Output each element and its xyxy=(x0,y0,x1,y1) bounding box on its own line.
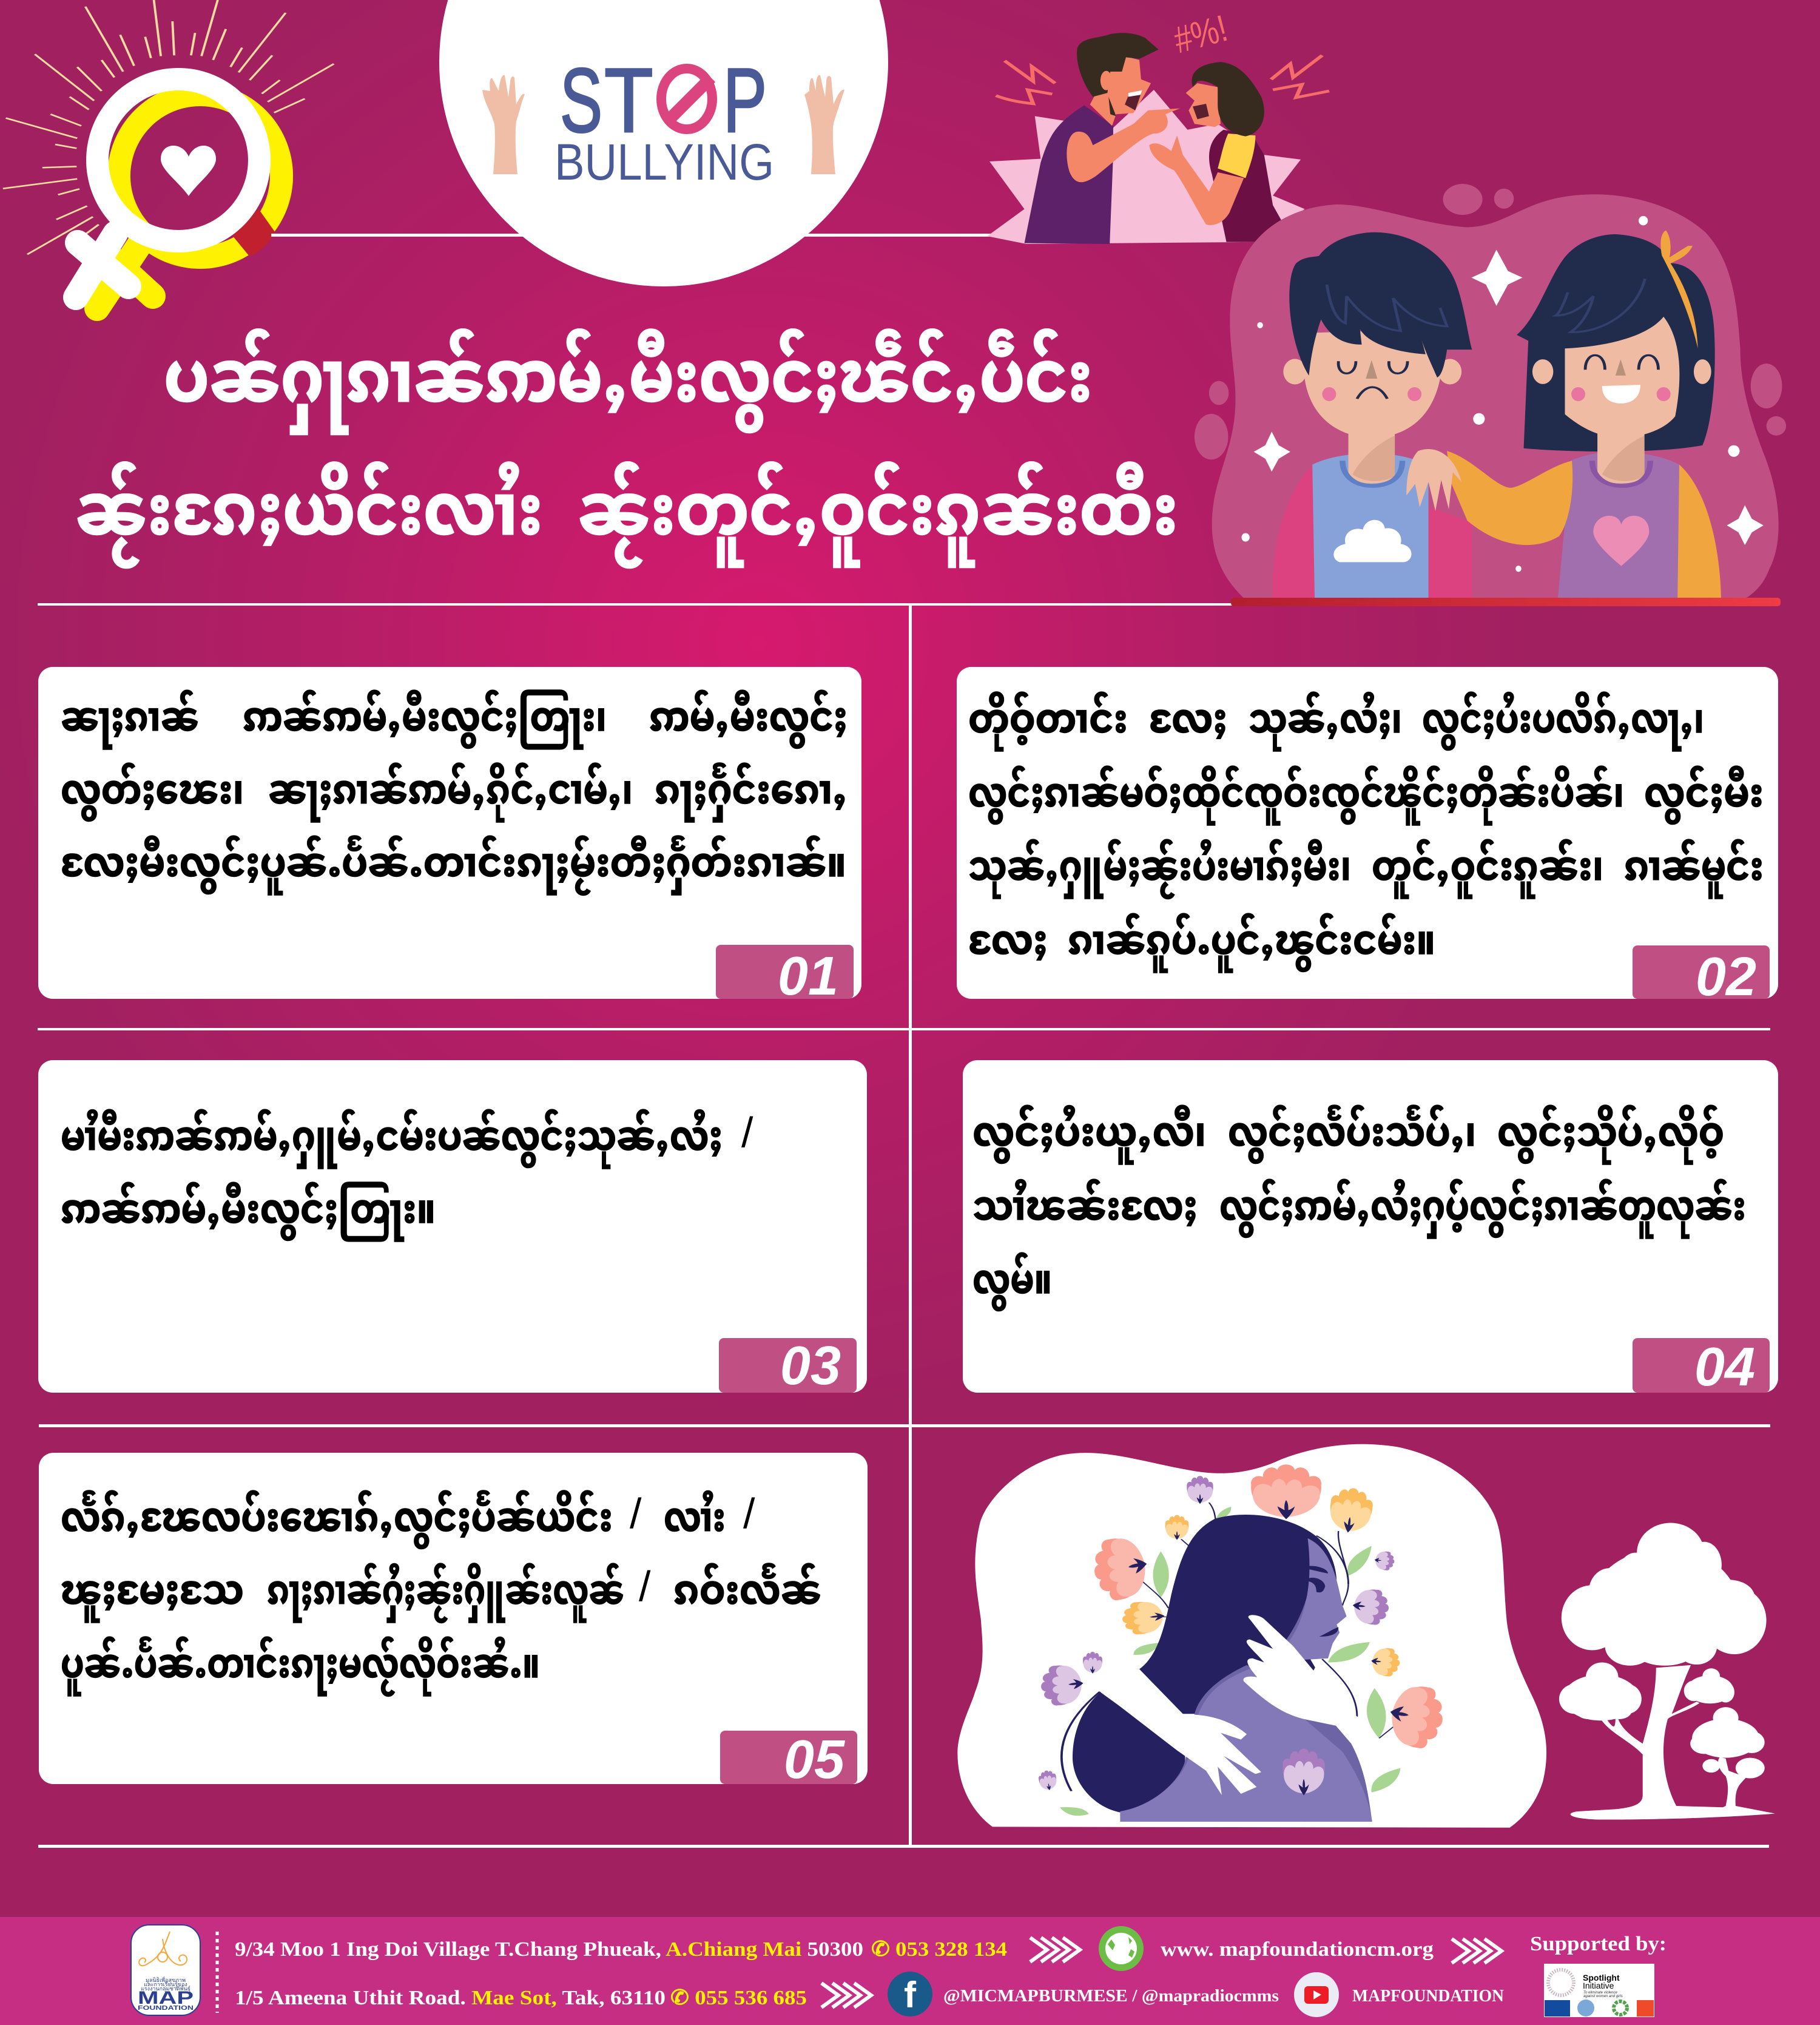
card 01 text xyxy=(61,689,848,896)
grid rules xyxy=(38,603,1770,1848)
map foundation logo: MAP xyxy=(138,1988,194,2008)
card 04 text: လွင်ႈသိုပ်ႇလိုဝ့် xyxy=(1497,1104,1724,1165)
flowers xyxy=(1090,1464,1448,1751)
title line 1: ပၼ်ႁႃၵၢၼ်ၵာမ်ႇမီးလွင်ႈၽဵင်ႇပဵင်း xyxy=(164,328,1093,434)
white ring xyxy=(86,68,271,252)
girl ears xyxy=(1532,359,1553,384)
dashed divider xyxy=(216,1932,218,2013)
card 05 text: / xyxy=(743,1490,755,1537)
badge 01 xyxy=(716,945,854,1007)
illustration: woman and flowers xyxy=(957,1444,1546,1828)
spotlight initiative logo: To eliminate violence xyxy=(1583,1991,1617,1995)
icon: facebook xyxy=(888,1972,932,2017)
phone 2: ✆ 055 536 685 xyxy=(670,1987,807,2009)
panel: card 02 xyxy=(957,667,1778,1007)
spotlight initiative logo: Spotlight xyxy=(1583,1973,1620,1983)
supported by: Supported by: xyxy=(1530,1933,1667,1955)
boy hair xyxy=(1289,232,1472,377)
card 05 text: ၽူႈမႄႈသႄ xyxy=(61,1567,244,1623)
card 02 text: လႄႈ xyxy=(968,918,1048,962)
STOP text: S xyxy=(560,50,602,151)
girl xyxy=(1406,231,1721,598)
panel: card 05 xyxy=(39,1453,868,1790)
female symbol icon with rays xyxy=(3,0,334,308)
white circle xyxy=(439,0,888,286)
burst xyxy=(987,90,1305,244)
boy face details xyxy=(1338,361,1407,399)
girl face xyxy=(1565,317,1679,438)
leaves xyxy=(1060,1507,1401,1816)
map foundation logo: มูลนิธิเพื่อสุขภาพ xyxy=(146,1976,186,1984)
card 02 text: လွင်ႈၵၢၼ်မဝ်ႈထိုင်ၸူဝ်းၸွင်ၽိူင်ႈတိုၼ်းပိၼ်၊ xyxy=(968,765,1624,825)
girl hair back xyxy=(1517,234,1715,451)
red bar xyxy=(1231,598,1781,606)
boy ears xyxy=(1283,359,1307,385)
girl neck xyxy=(1597,434,1645,484)
white cross xyxy=(76,234,129,297)
card 04 text: သၢႆၽၼ်းလႄႈ xyxy=(972,1178,1198,1228)
badge 05: 05 xyxy=(784,1729,846,1790)
icon: youtube xyxy=(1294,1972,1339,2017)
stop bullying badge xyxy=(439,0,888,286)
card 02 text: တိုဝ့်တၢင်း xyxy=(968,691,1128,751)
card 04 text: လွမ်။ xyxy=(972,1252,1052,1311)
title line 2: ၼႂ်းတူင်ႇဝူင်းၵူၼ်းထီး xyxy=(578,461,1178,568)
panel: card 01 xyxy=(38,667,861,1007)
card 02 text xyxy=(968,691,1764,973)
woman xyxy=(1149,62,1281,242)
icon: facebook: f xyxy=(904,1975,917,2015)
card 02 text: သုၼ်ႇႁူမ်ႈၼႂ်းပႆးမၢၵ်ႈမီး၊ xyxy=(968,839,1351,899)
girl face details xyxy=(1585,355,1659,370)
bubbles xyxy=(1195,184,1786,459)
card 05 text: လၢႆး xyxy=(664,1490,726,1540)
card 01 text: ၼႃႈၵၢၼ်ၵာမ်ႇၵိုင်ႇငၢမ်ႇ၊ xyxy=(268,762,633,822)
boy neck xyxy=(1349,434,1395,484)
badge 05 xyxy=(720,1729,857,1790)
badge 02 xyxy=(1633,945,1770,1007)
chevrons 1 xyxy=(1030,1938,1080,1962)
card 05 text: / xyxy=(639,1563,651,1610)
card 05 text: ပူၼ်ႉပႅၼ်ႉတၢင်းၵႃႈမလႂ်လိုဝ်းၼႆႉ။ xyxy=(61,1636,540,1697)
heart xyxy=(161,146,216,196)
hand on shoulder xyxy=(1406,449,1461,511)
STOP text: P xyxy=(723,50,767,151)
website: www. mapfoundationcm.org xyxy=(1161,1938,1434,1961)
card 02 text: လွင်ႈမီး xyxy=(1644,765,1764,824)
rays xyxy=(3,0,334,254)
title xyxy=(75,328,1178,568)
card 02 text: လွင်ႈပႆးပလိၵ်ႇလႃႇ၊ xyxy=(1422,691,1704,751)
boy xyxy=(1273,232,1472,598)
card 02 text: သုၼ်ႇလႆႈ၊ xyxy=(1249,691,1402,751)
lower hair xyxy=(1073,1692,1185,1813)
arm and hand on shoulder xyxy=(1084,1669,1261,1795)
badge 04: 04 xyxy=(1694,1337,1755,1398)
footer xyxy=(0,1917,1820,2025)
card 01 text: လွတ်ႈၽေး၊ xyxy=(61,762,244,821)
boy shirt xyxy=(1273,465,1472,598)
chevrons 2 xyxy=(1452,1939,1502,1963)
title line 2 xyxy=(75,461,1178,568)
card 03 text xyxy=(61,1109,753,1242)
card 04 text: လွင်ႈပႆးယူႇလီ၊ xyxy=(972,1104,1206,1165)
card 04 text: လွင်ႈလႅပ်းသႅပ်ႇ၊ xyxy=(1228,1104,1476,1163)
girl headband xyxy=(1660,231,1698,348)
face xyxy=(1281,1538,1331,1660)
girl shirt xyxy=(1558,452,1679,598)
hand on neck xyxy=(1244,1615,1357,1730)
card 05 text: လႅၵ်ႇၽႄလပ်းၽေၢၵ်ႇလွင်ႈပႅၼ်ယိင်း xyxy=(61,1490,613,1549)
sparkles xyxy=(1241,216,1764,572)
address line 1: 9/34 Moo 1 Ing Doi Village T.Chang Phueak, A.Chiang Mai 50300 xyxy=(235,1938,863,1961)
card 01 text: ၵာၼ်ၵာမ်ႇမီးလွင်ႈတြႃး၊ xyxy=(243,689,607,749)
yellow shadow symbol xyxy=(97,83,293,308)
card 01 text: ၼႃႈၵၢၼ် xyxy=(61,689,199,749)
cloud xyxy=(1333,520,1412,562)
card 01 text: ၵာမ်ႇမီးလွင်ႈ xyxy=(649,689,848,748)
youtube name: MAPFOUNDATION xyxy=(1352,1987,1504,2006)
panel: card 04 xyxy=(963,1060,1778,1398)
card 03 text: / xyxy=(741,1109,753,1156)
girl heart xyxy=(1593,516,1649,566)
card 02 text: ၵၢၼ်မူင်း xyxy=(1624,839,1764,899)
card 02 text: ၵၢၼ်ၵူပ်ႉပူင်ႇၽွင်းငမ်း။ xyxy=(1068,913,1435,973)
address line 2: 1/5 Ameena Uthit Road. Mae Sot, Tak, 63110 xyxy=(235,1987,666,2009)
right hand xyxy=(804,75,844,174)
swear symbols: #%! xyxy=(1170,7,1232,62)
STOP text: T xyxy=(604,49,653,151)
card 05 text: ၵႃႈၵၢၼ်ႁႆႈၼႂ်းႁိူၼ်းလူၼ် xyxy=(267,1563,624,1623)
boy face xyxy=(1305,329,1441,438)
social handles: @MICMAPBURMESE / @mapradiocmms xyxy=(943,1987,1279,2006)
map foundation logo xyxy=(131,1925,200,2015)
card 04 text: လွင်ႈၵာမ်ႇလႆႈႁပ့်လွင်ႈၵၢၼ်တူလုၼ်း xyxy=(1219,1178,1746,1239)
white blob xyxy=(957,1444,1546,1828)
friends illustration xyxy=(1195,184,1786,598)
boy collar xyxy=(1343,461,1403,486)
chevrons 3 xyxy=(821,1983,871,2007)
card 03 text: ၵာၼ်ၵာမ်ႇမီးလွင်ႈတြႃး။ xyxy=(61,1182,436,1242)
map foundation logo: แรงงานกลุ่มชาติพันธุ์ xyxy=(141,1985,190,1992)
red segment xyxy=(232,209,275,255)
arguing couple illustration xyxy=(987,33,1329,244)
badge 02: 02 xyxy=(1696,947,1756,1007)
card 02 text: လႄႈ xyxy=(1149,696,1227,741)
girl collar xyxy=(1592,461,1650,486)
badge 01: 01 xyxy=(778,946,838,1007)
stems xyxy=(1141,1503,1398,1822)
map foundation logo: และการเรียนรู้ของ xyxy=(144,1981,187,1988)
card 05 text: ၵဝ်းလႅၼ် xyxy=(673,1563,821,1612)
panel: card 03 xyxy=(38,1060,867,1396)
card 05 text xyxy=(61,1490,821,1697)
footer band xyxy=(0,1917,1820,2025)
left hand xyxy=(482,75,525,174)
card 05 text: / xyxy=(630,1490,642,1537)
card 04 text xyxy=(972,1104,1746,1311)
spotlight initiative logo: Initiative xyxy=(1583,1981,1614,1990)
facial features xyxy=(1308,1566,1338,1637)
body xyxy=(1120,1665,1372,1822)
girl arm xyxy=(1447,451,1572,545)
icon: globe xyxy=(1099,1926,1144,1971)
card 01 text: ၵႃႈႁႅင်းၵေၢႇ xyxy=(655,762,848,822)
phone 1: ✆ 053 328 134 xyxy=(871,1938,1007,1961)
blob xyxy=(1212,194,1779,598)
spotlight initiative logo: against women and girls xyxy=(1583,1995,1623,1998)
BULLYING text: BULLYING xyxy=(554,134,774,191)
hair xyxy=(1139,1515,1354,1714)
horizontal rule under logo xyxy=(271,234,999,237)
badge 03: 03 xyxy=(780,1336,841,1396)
spotlight initiative logo xyxy=(1544,1964,1654,2017)
icon: tree xyxy=(1559,1523,1775,1820)
title line 2: ၼႂ်းၵႄႈယိင်းလၢႆး xyxy=(75,461,543,568)
STOP text xyxy=(560,49,767,151)
badge 03 xyxy=(719,1336,857,1396)
map foundation logo: FOUNDATION xyxy=(138,2005,194,2012)
crossed O xyxy=(661,69,712,129)
badge 04 xyxy=(1633,1337,1770,1398)
man xyxy=(1025,33,1180,244)
card 02 text: တူင်ႇဝူင်းၵူၼ်း၊ xyxy=(1372,839,1603,899)
card 01 text: လႄႈမီးလွင်ႈပူၼ်ႉပႅၼ်ႉတၢင်းၵႃႈမႂ်းတီႈႁႅတ်းၵၢၼ်။ xyxy=(61,835,846,896)
card 03 text: မၢႆမီးၵာၼ်ၵာမ်ႇႁူမ်ႇငမ်းပၼ်လွင်ႈသုၼ်ႇလႆႈ xyxy=(61,1109,723,1169)
anger marks xyxy=(996,55,1329,104)
